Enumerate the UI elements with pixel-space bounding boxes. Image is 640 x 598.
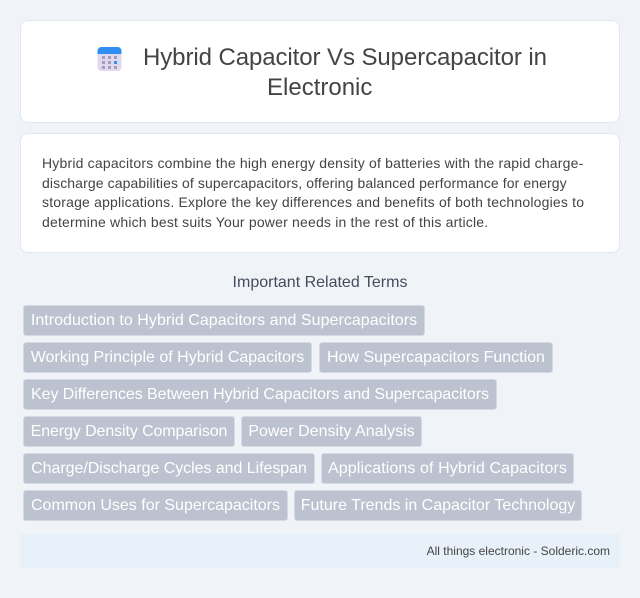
chip	[23, 453, 315, 484]
title: Hybrid Capacitor Vs Supercapacitor in	[143, 44, 547, 71]
chip: Common Uses for Supercapacitors	[31, 497, 280, 514]
related terms chips	[23, 305, 582, 521]
chip	[321, 453, 574, 484]
intro paragraph: discharge capabilities of supercapacitors, offering balanced performance for energy	[42, 175, 567, 191]
intro paragraph: Hybrid capacitors combine the high energy density of batteries with the rapid charge-	[42, 155, 583, 171]
chip	[294, 490, 582, 521]
title	[143, 44, 547, 101]
header card	[20, 20, 620, 123]
chip: Future Trends in Capacitor Technology	[301, 497, 575, 514]
intro text panel	[20, 133, 620, 253]
chip	[23, 490, 288, 521]
title: Electronic	[267, 74, 372, 101]
chip: Key Differences Between Hybrid Capacitors and Supercapacitors	[31, 386, 489, 403]
related terms heading: Important Related Terms	[233, 274, 407, 291]
chip	[23, 305, 425, 336]
chip: Power Density Analysis	[248, 423, 415, 440]
chip: Energy Density Comparison	[31, 423, 227, 440]
chip: Charge/Discharge Cycles and Lifespan	[31, 460, 307, 477]
chip: Introduction to Hybrid Capacitors and Supercapacitors	[31, 312, 417, 329]
chip	[319, 342, 553, 373]
intro paragraph: storage applications. Explore the key differences and benefits of both technologies to	[42, 194, 584, 210]
chip: How Supercapacitors Function	[327, 349, 545, 366]
chip	[241, 416, 422, 447]
intro paragraph: determine which best suits Your power needs in the rest of this article.	[42, 214, 488, 230]
footer bar	[20, 534, 620, 568]
chip: Working Principle of Hybrid Capacitors	[31, 349, 304, 366]
chip	[23, 342, 312, 373]
chip	[23, 416, 235, 447]
chip: Applications of Hybrid Capacitors	[328, 460, 567, 477]
icon: calendar grid	[98, 47, 122, 71]
chip	[23, 379, 497, 410]
footer credit: All things electronic - Solderic.com	[427, 544, 610, 558]
intro paragraph	[42, 155, 584, 230]
